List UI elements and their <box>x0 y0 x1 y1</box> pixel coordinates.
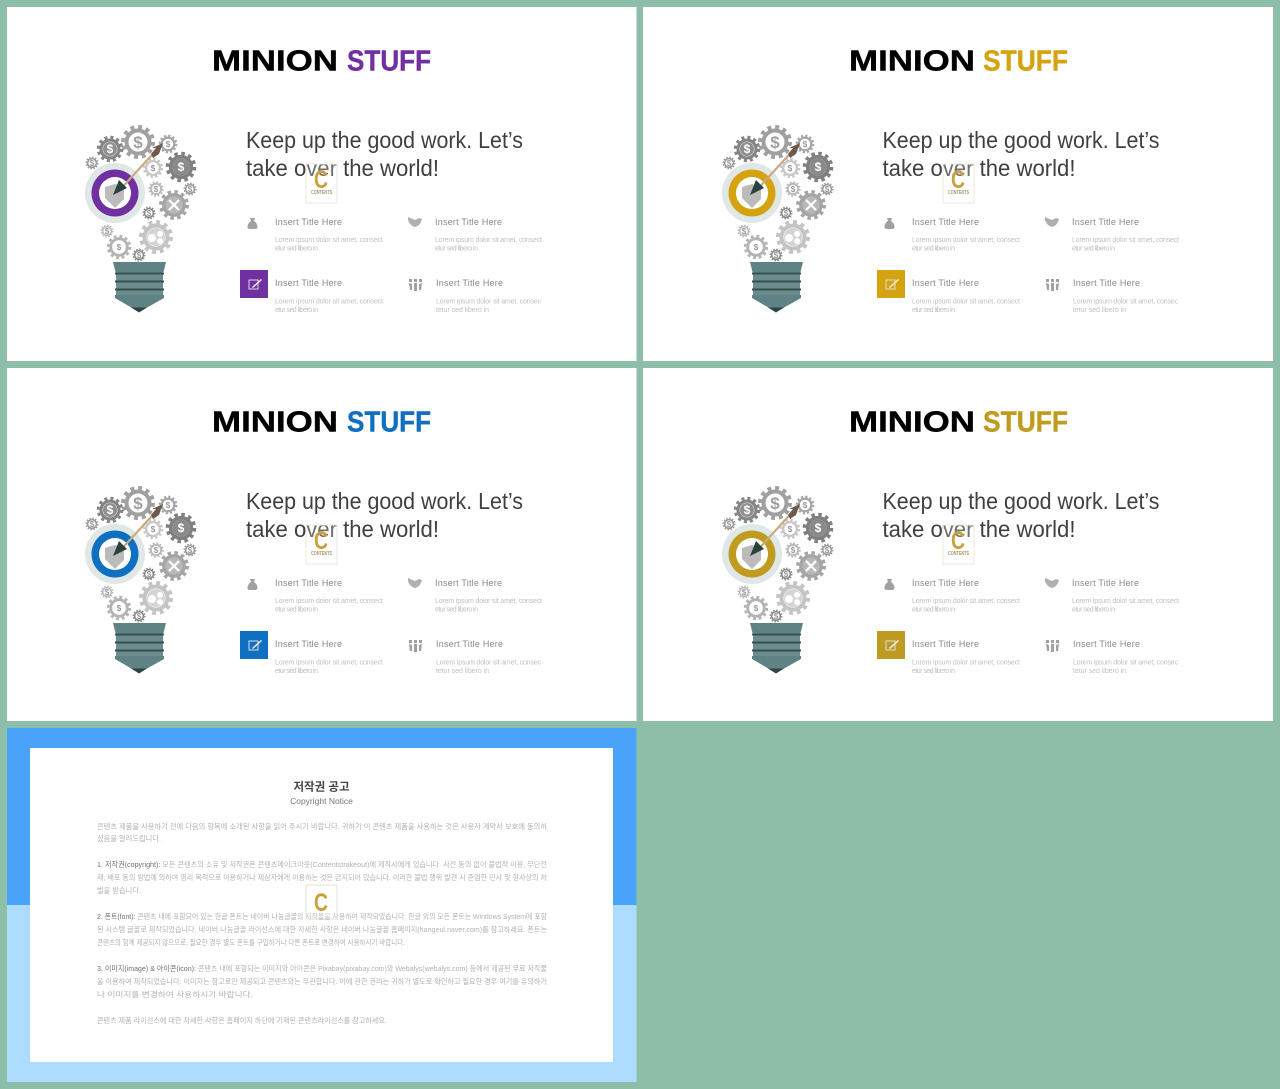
feature items: Insert Title Here <box>912 217 979 227</box>
notice body text: 콘텐츠 제품 라이선스에 대한 자세한 사항은 홈페이지 하단에 기재된 콘텐츠라이선스를 참고하세요. <box>97 1015 387 1025</box>
feature items: Lorem ipsum dolor sit amet, consect <box>275 660 383 666</box>
feature items: etur sed libero in <box>912 668 955 675</box>
icon: edit square <box>877 631 905 659</box>
panel: gold slide <box>643 7 1273 361</box>
feature items: Lorem ipsum dolor sit amet, consect <box>275 598 383 605</box>
title: MINION <box>212 406 338 438</box>
feature items: Lorem ipsum dolor sit amet, consect <box>435 237 542 244</box>
feature items: Insert Title Here <box>1073 639 1140 649</box>
watermark <box>306 164 337 203</box>
panel: dark gold slide <box>643 368 1273 721</box>
title: MINION <box>849 406 975 438</box>
title <box>212 46 431 78</box>
feature items: etur sed libero in <box>275 606 318 614</box>
notice heading <box>290 780 353 806</box>
feature items: etur sed libero in <box>275 668 318 675</box>
headline: take over the world! <box>246 516 439 542</box>
feature items: Insert Title Here <box>436 278 503 288</box>
feature items: etur sed libero in <box>275 307 318 314</box>
icons: money bag, handshake, team, pencil <box>884 217 1059 291</box>
title <box>849 406 1068 438</box>
icons: money bag, handshake, team, pencil <box>884 578 1059 652</box>
watermark: C <box>314 889 328 917</box>
panel: purple slide <box>7 7 636 361</box>
watermark: C <box>314 527 328 555</box>
title: MINION <box>849 46 975 78</box>
icon: gear light bulb with target: $$$$$$$$$ <box>90 140 193 260</box>
feature items: Lorem ipsum dolor sit amet, consect <box>1072 237 1179 244</box>
feature items <box>912 217 1179 314</box>
feature items: Insert Title Here <box>1072 578 1139 588</box>
feature items: Insert Title Here <box>275 578 342 588</box>
notice body text: 콘텐츠 제품을 사용하기 전에 다음의 항목에 소개된 사항을 읽어 주시기 바랍니다. 귀하가 이 콘텐츠 제품을 사용하는 것은 사용자 계약서 보호에 동의하 <box>97 821 547 831</box>
watermark: CONTENTS <box>311 190 333 196</box>
notice body text: 된 시스템 글꼴로 제작되었습니다. 네이버 나눔글꼴 라이선스에 대한 자세한 사항은 네이버 나눔글꼴 홈페이지(hangeul.naver.com)를 참고하세요. 폰트는 <box>97 924 547 934</box>
feature items: etur sed libero in <box>912 246 955 252</box>
feature items: etur sed libero in <box>1072 246 1115 252</box>
feature items: Lorem ipsum dolor sit amet, consec <box>1073 660 1178 666</box>
icon: gear light bulb with target <box>722 127 833 312</box>
feature items: Insert Title Here <box>1072 217 1139 227</box>
icon: gear light bulb with target <box>85 127 196 312</box>
feature items <box>275 217 542 314</box>
watermark: CONTENTS <box>948 551 970 557</box>
panel: blue slide <box>7 368 636 721</box>
feature items: Lorem ipsum dolor sit amet, consect <box>912 298 1020 306</box>
icon: gear light bulb with target: $$$$$$$$$ <box>90 501 193 621</box>
notice heading: 저작권 공고 <box>293 780 350 794</box>
icon: gear light bulb with target: $$ <box>744 142 822 174</box>
feature items: tetur sed libero in <box>436 668 489 675</box>
title <box>212 406 431 438</box>
feature items: Lorem ipsum dolor sit amet, consect <box>1072 598 1179 605</box>
watermark: C <box>314 166 328 194</box>
notice body text: 셨음을 알려드립니다. <box>97 833 161 843</box>
headline: take over the world! <box>882 516 1076 542</box>
headline: Keep up the good work. Let’s <box>882 488 1160 514</box>
notice body text: 나 이미지를 변경하여 사용하시기 바랍니다. <box>97 989 253 999</box>
feature items: etur sed libero in <box>912 307 955 314</box>
notice body text: 콘텐츠의 함께 제공되지 않으므로, 필요한 경우 별도 폰트를 구입하거나 다른 폰트로 변경하여 사용하시기 바랍니다. <box>97 937 405 947</box>
title: STUFF <box>347 406 431 438</box>
icon: gear light bulb with target: $$ <box>107 142 185 174</box>
headline: Keep up the good work. Let’s <box>882 127 1160 153</box>
watermark <box>306 525 337 564</box>
headline <box>246 488 523 542</box>
feature items: tetur sed libero in <box>1073 307 1126 314</box>
feature items: Lorem ipsum dolor sit amet, consect <box>912 598 1020 605</box>
feature items: Insert Title Here <box>912 278 979 288</box>
notice body text: 을 이용하여 제작되었습니다. 이미지는 참고로만 제공되고 콘텐츠와는 무관합니다. 이에 관한 권리는 귀하가 별도로 확인하고 필요한 경우 여기를 유의하거 <box>97 976 547 986</box>
title: STUFF <box>983 406 1068 438</box>
watermark <box>943 164 974 203</box>
notice body text: 벌을 받습니다. <box>97 885 141 895</box>
title <box>849 46 1068 78</box>
watermark: CONTENTS <box>311 551 333 557</box>
watermark <box>943 525 974 564</box>
feature items: Insert Title Here <box>275 639 342 649</box>
watermark: C <box>951 527 965 555</box>
notice body text: 3. 이미지(image) & 아이콘(icon): 콘텐츠 내에 포함되는 이미지와 아이콘은 Pixabay(pixabay.com)와 Webalys(webalys.com) 등에서 제공된 무료 저작물 <box>97 963 547 973</box>
icon: edit square <box>240 270 268 298</box>
feature items: etur sed libero in <box>435 606 478 614</box>
icon: gear light bulb with target: $ <box>133 494 143 513</box>
headline: Keep up the good work. Let’s <box>246 127 523 153</box>
icon: gear light bulb with target: $$ <box>744 503 822 535</box>
icon: gear light bulb with target: $$$$$$$$$ <box>727 501 830 621</box>
title: STUFF <box>983 46 1068 78</box>
icon: gear light bulb with target: $$ <box>107 503 185 535</box>
feature items: Lorem ipsum dolor sit amet, consec <box>1073 298 1178 306</box>
feature items: Insert Title Here <box>435 217 502 227</box>
icon: gear light bulb with target: $ <box>133 133 143 152</box>
feature items: tetur sed libero in <box>1073 668 1126 675</box>
feature items <box>275 578 542 675</box>
title: STUFF <box>347 46 431 78</box>
watermark <box>306 885 337 919</box>
feature items: Lorem ipsum dolor sit amet, consec <box>436 660 542 666</box>
watermark: C <box>951 166 965 194</box>
headline: take over the world! <box>882 155 1076 181</box>
headline: take over the world! <box>246 155 439 181</box>
feature items: Insert Title Here <box>436 639 503 649</box>
icon: gear light bulb with target: $ <box>770 133 780 152</box>
feature items <box>912 578 1179 675</box>
icon: edit square <box>240 631 268 659</box>
feature items: Lorem ipsum dolor sit amet, consect <box>275 298 383 306</box>
feature items: Insert Title Here <box>912 578 979 588</box>
feature items: Lorem ipsum dolor sit amet, consec <box>436 298 542 306</box>
feature items: Insert Title Here <box>1073 278 1140 288</box>
icon: edit square <box>877 270 905 298</box>
headline: Keep up the good work. Let’s <box>246 488 523 514</box>
feature items: Insert Title Here <box>275 217 342 227</box>
notice heading: Copyright Notice <box>290 796 353 806</box>
icon: gear light bulb with target <box>85 488 196 674</box>
feature items: Insert Title Here <box>912 639 979 649</box>
feature items: etur sed libero in <box>912 606 955 614</box>
feature items: Lorem ipsum dolor sit amet, consect <box>912 660 1020 666</box>
title: MINION <box>212 46 338 78</box>
feature items: etur sed libero in <box>275 246 318 252</box>
feature items: etur sed libero in <box>435 246 478 252</box>
notice body text: 2. 폰트(font): 콘텐츠 내에 포함되어 있는 한글 폰트는 네이버 나눔글꼴의 저작물을 사용하여 제작되었습니다. 한글 외의 모든 폰트는 Windows System에 포함 <box>97 911 547 921</box>
watermark: CONTENTS <box>948 190 970 196</box>
icons: money bag, handshake, team, pencil <box>248 217 422 291</box>
icon: gear light bulb with target: $ <box>770 494 780 513</box>
icons: money bag, handshake, team, pencil <box>248 578 422 652</box>
notice body text: 1. 저작권(copyright): 모든 콘텐츠의 소유 및 저작권은 콘텐츠메이크아웃(Contentstrakeout)에 제작사에게 있습니다. 사전 동의 없이 불법적 이용, 무단전 <box>97 859 547 869</box>
feature items: etur sed libero in <box>1072 606 1115 614</box>
notice body text <box>97 821 547 1025</box>
notice body text: 재, 배포 등의 방법에 의하여 영리 목적으로 이용하거나 제삼자에게 이용하는 것은 금지되어 있습니다. 이러한 불법 행위 발견 시 준엄한 민사 및 형사상의 처 <box>97 872 547 882</box>
icon: gear light bulb with target <box>722 488 833 674</box>
headline <box>246 127 523 181</box>
feature items: tetur sed libero in <box>436 307 489 314</box>
panel: copyright notice <box>7 728 636 1082</box>
feature items: Lorem ipsum dolor sit amet, consect <box>912 237 1020 244</box>
headline <box>882 488 1160 542</box>
feature items: Lorem ipsum dolor sit amet, consect <box>275 237 383 244</box>
icon: gear light bulb with target: $$$$$$$$$ <box>727 140 830 260</box>
headline <box>882 127 1160 181</box>
feature items: Lorem ipsum dolor sit amet, consect <box>435 598 542 605</box>
feature items: Insert Title Here <box>435 578 502 588</box>
feature items: Insert Title Here <box>275 278 342 288</box>
